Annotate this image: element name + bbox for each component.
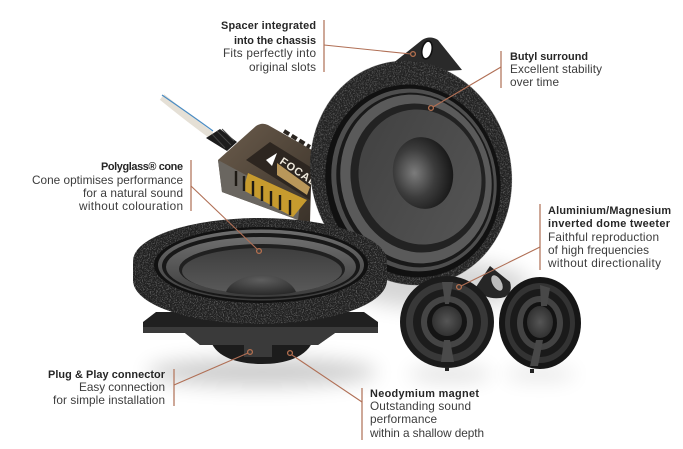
callout: neodymium magnet: Outstanding sound — [370, 399, 471, 413]
cone — [343, 96, 497, 258]
callout: spacer integrated into the chassis: Fits perfectly into — [223, 46, 316, 60]
callout: aluminium/magnesium inverted dome tweeter: of high frequencies — [548, 243, 649, 257]
mounting tab: bottom — [474, 266, 511, 298]
foam ring — [285, 38, 537, 308]
icon: rear midrange speaker — [285, 38, 537, 309]
callout: polyglass cone: for a natural sound — [83, 186, 183, 200]
surround — [304, 65, 522, 297]
callout: butyl surround: Butyl surround — [510, 51, 588, 63]
callout: spacer integrated into the chassis: Spacer integrated — [221, 20, 316, 32]
callout: plug and play connector: for simple installation — [53, 393, 165, 407]
callout: aluminium/magnesium inverted dome tweeter: inverted dome tweeter — [548, 218, 671, 230]
foam ring side — [133, 262, 387, 324]
dust cap — [387, 132, 459, 214]
dust cap — [226, 275, 296, 295]
icon: crossover box with cable — [162, 95, 319, 222]
magnet — [210, 338, 314, 364]
cone — [182, 248, 342, 294]
callout: plug and play connector — [48, 350, 252, 407]
callout: polyglass cone — [32, 160, 261, 253]
callout: plug and play connector: Easy connection — [79, 380, 165, 394]
connector block — [244, 345, 272, 357]
callout: spacer integrated into the chassis: into the chassis — [234, 35, 316, 47]
callout: polyglass cone: Cone optimises performance — [32, 173, 183, 187]
mounting tab hole — [420, 40, 434, 60]
mounting tab: top — [392, 38, 462, 72]
mounting plate — [143, 312, 378, 345]
callout: plug and play connector: Plug & Play connector — [48, 369, 166, 381]
icon: front midrange speaker — [133, 218, 387, 386]
callout: polyglass cone: Polyglass® cone — [101, 161, 183, 173]
drop shadow — [147, 358, 377, 386]
callout: polyglass cone: without colouration — [78, 199, 183, 213]
icon: left tweeter — [400, 276, 494, 380]
callout: neodymium magnet: within a shallow depth — [369, 426, 484, 440]
callout: aluminium/magnesium inverted dome tweeter: Aluminium/Magnesium — [548, 205, 671, 217]
icon: right tweeter — [499, 277, 581, 379]
callout: aluminium/magnesium inverted dome tweeter: Faithful reproduction — [548, 230, 659, 244]
icon: crossover box with cable: FOCAL — [277, 156, 319, 189]
callout: neodymium magnet — [288, 351, 484, 440]
callout: butyl surround: over time — [510, 75, 559, 89]
foam ring top — [133, 218, 387, 304]
callout: butyl surround — [429, 51, 602, 110]
callout: butyl surround: Excellent stability — [510, 62, 602, 76]
surround — [154, 227, 368, 303]
callout: spacer integrated into the chassis — [221, 20, 415, 74]
callout: aluminium/magnesium inverted dome tweeter: without directionality — [547, 256, 661, 270]
soft shadow — [350, 261, 530, 309]
callout: spacer integrated into the chassis: original slots — [249, 60, 316, 74]
callout: neodymium magnet: performance — [370, 412, 437, 426]
callout: neodymium magnet: Neodymium magnet — [370, 388, 479, 400]
callout: aluminium/magnesium inverted dome tweeter — [457, 204, 671, 289]
